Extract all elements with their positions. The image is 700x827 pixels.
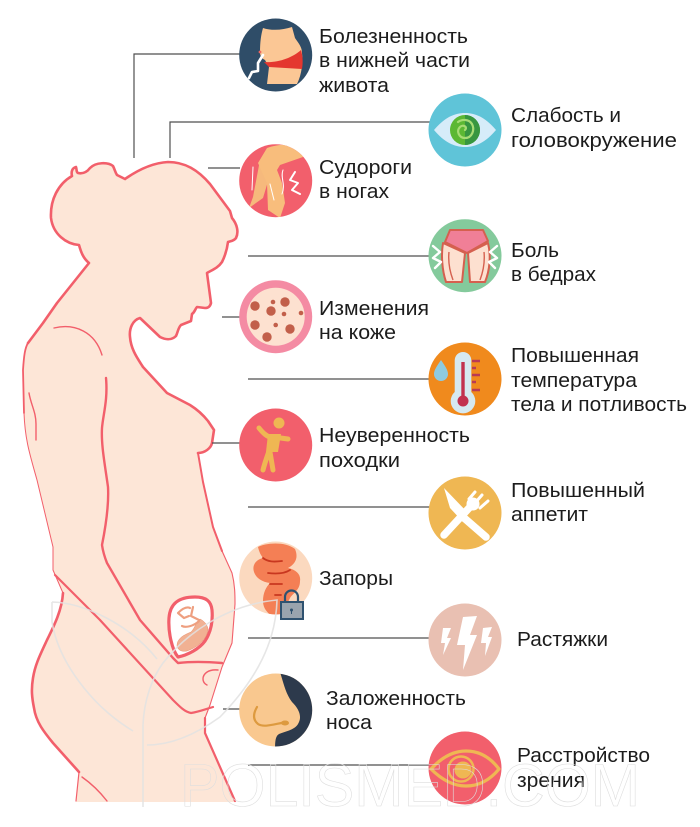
arm rear line [29, 393, 36, 440]
arm front line [102, 378, 222, 663]
icon: stretch marks bolts [428, 604, 502, 676]
front leg outline [205, 718, 235, 801]
watermark [52, 600, 640, 819]
upper back outline [23, 343, 28, 413]
watermark: POLISMED.COM [180, 752, 640, 819]
pregnant woman silhouette [23, 162, 237, 802]
label: leg cramps: Судороги [319, 157, 412, 179]
icon: padlock [281, 591, 303, 619]
label: lower abdomen pain: живота [319, 75, 390, 97]
connector lines [134, 54, 430, 765]
label: lower abdomen pain [319, 26, 470, 97]
label: stuffy nose [326, 688, 466, 734]
womb with fetus [169, 597, 212, 657]
label: appetite: Повышенный [511, 480, 645, 502]
label: temperature: температура [511, 370, 638, 392]
label: stretch marks: Растяжки [517, 629, 608, 651]
rear leg outline [76, 772, 79, 801]
womb [169, 597, 212, 657]
label: unsteady gait: походки [319, 450, 400, 472]
label: weakness: головокружение [511, 130, 677, 152]
fetus limbs [178, 607, 199, 627]
navel [203, 670, 218, 685]
icon: leg cramps [239, 144, 312, 218]
label: temperature: Повышенная [511, 345, 639, 367]
icon: hip pain [428, 219, 502, 292]
label: weakness [511, 105, 677, 152]
label: hip pain [511, 240, 596, 286]
label: vision: зрения [517, 770, 585, 792]
icon: vision disorder [428, 732, 502, 804]
label: skin changes: Изменения [319, 298, 429, 320]
label: temperature [511, 345, 687, 416]
icon: constipation intestine [239, 542, 312, 616]
icon: lower abdomen pain [239, 18, 312, 92]
label: lower abdomen pain: в нижней части [319, 50, 470, 72]
label: skin changes [319, 298, 429, 344]
label: appetite [511, 480, 645, 526]
icon: stuffy nose [239, 674, 312, 746]
label: stuffy nose: Заложенность [326, 688, 466, 710]
belly outline upper [198, 453, 222, 551]
label: weakness: Слабость и [511, 105, 621, 127]
fetus [177, 619, 208, 651]
label: unsteady gait: Неуверенность [319, 425, 470, 447]
label: temperature: тела и потливость [511, 394, 687, 416]
label: stuffy nose: носа [326, 712, 373, 734]
label: leg cramps [319, 157, 412, 203]
head and chest outline [28, 162, 237, 453]
body fill [23, 162, 237, 802]
label: unsteady gait [319, 425, 470, 472]
label: constipation: Запоры [319, 568, 393, 590]
icon: unsteady gait [239, 408, 312, 482]
shoulder line [54, 327, 102, 355]
labels [319, 26, 687, 792]
icon: knife and fork [428, 476, 502, 550]
forearm line [55, 575, 213, 713]
label: leg cramps: в ногах [319, 181, 389, 203]
label: hip pain: в бедрах [511, 264, 596, 286]
label: vision: Расстройство [517, 745, 650, 767]
label: appetite: аппетит [511, 504, 588, 526]
label: skin changes: на коже [319, 322, 396, 344]
label: vision [517, 745, 650, 792]
icon: skin spots [239, 280, 312, 353]
back outline [24, 413, 63, 593]
icon: thermometer [428, 342, 502, 416]
label: lower abdomen pain: Болезненность [319, 26, 468, 48]
belly outline lower [205, 551, 235, 718]
icon: dizziness eye [428, 94, 502, 166]
buttock outline [32, 593, 79, 772]
label: hip pain: Боль [511, 240, 559, 262]
leg line [82, 777, 107, 801]
